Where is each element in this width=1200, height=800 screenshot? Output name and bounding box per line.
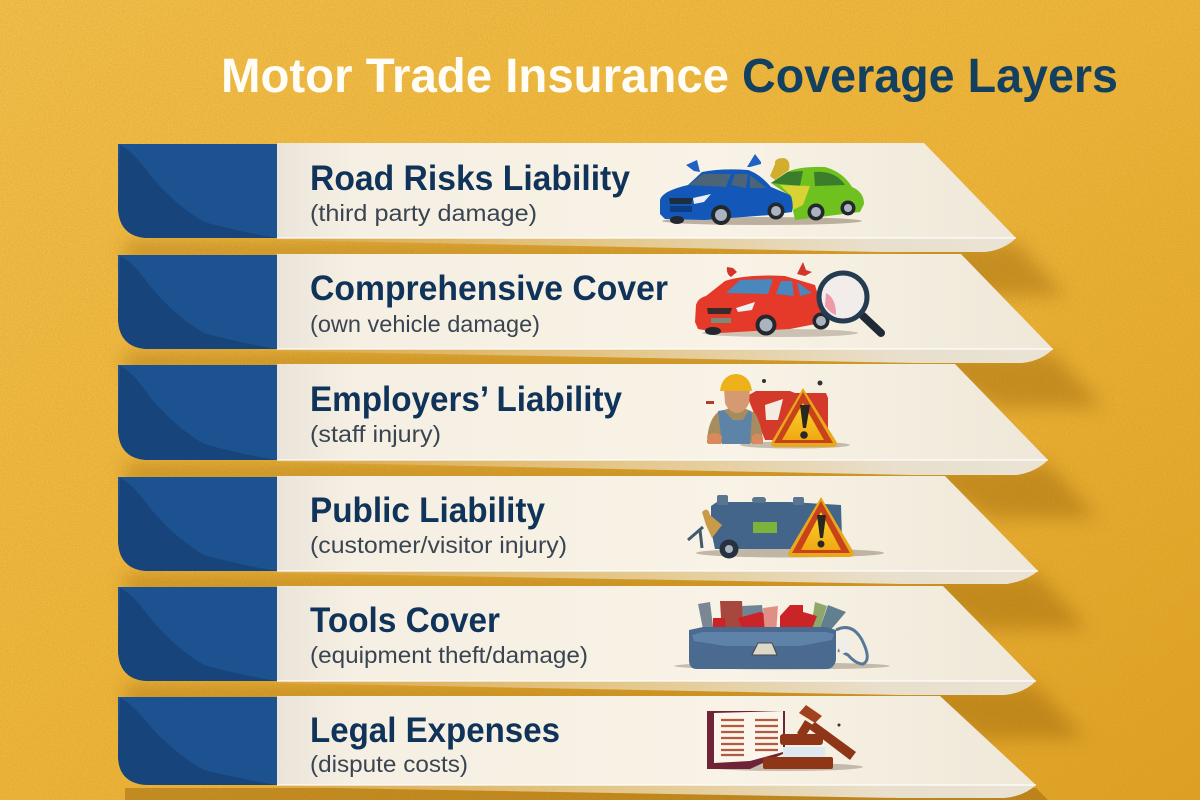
icon: toolbox xyxy=(674,601,890,670)
panel: comprehensive cover xyxy=(118,254,1103,407)
panel: public liability: Public Liability xyxy=(310,491,546,530)
title: Motor Trade Insurance xyxy=(221,50,729,103)
panel: legal expenses xyxy=(118,696,1048,800)
icon: red car and magnifier xyxy=(695,262,881,337)
icon: two cars colliding xyxy=(660,154,864,225)
panel: public liability xyxy=(118,476,1088,629)
panel: employers' liability xyxy=(118,364,1098,518)
panel: tools cover: (equipment theft/damage) xyxy=(310,642,588,668)
title xyxy=(221,50,1118,103)
panel: legal expenses: (dispute costs) xyxy=(310,751,468,777)
panel: comprehensive cover: Comprehensive Cover xyxy=(310,269,668,308)
panel: legal expenses: Legal Expenses xyxy=(310,711,560,750)
icon: law book and gavel xyxy=(707,705,863,771)
title: Coverage Layers xyxy=(742,50,1118,103)
panel: road risks liability: Road Risks Liability xyxy=(310,159,631,198)
panel: tools cover: Tools Cover xyxy=(310,601,500,640)
panel: public liability: (customer/visitor injury) xyxy=(310,532,567,558)
icon: equipment trolley and warning sign xyxy=(688,495,884,558)
icon: worker and warning sign xyxy=(706,374,850,448)
panel: employers' liability: (staff injury) xyxy=(310,421,441,447)
panel: tools cover xyxy=(118,586,1086,739)
panel: road risks liability: (third party damage) xyxy=(310,200,537,226)
panel: employers' liability: Employers’ Liability xyxy=(310,380,622,419)
panel: comprehensive cover: (own vehicle damage) xyxy=(310,311,540,337)
panel: road risks liability xyxy=(118,143,1066,296)
